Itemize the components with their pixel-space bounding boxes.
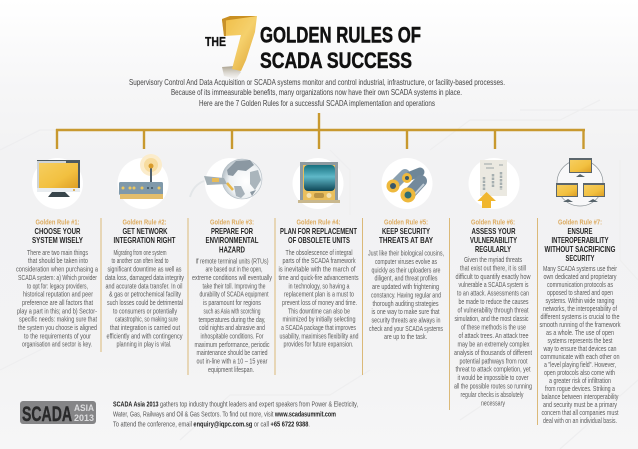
- panel: rule 2: GET NETWORK: [122, 226, 168, 236]
- panel: rule 2: such losses could be detrimental: [107, 298, 183, 307]
- panel: rule 6: difficult to quantify exactly how: [456, 272, 531, 281]
- panel: rule 6: be made to reduce the causes: [458, 297, 529, 306]
- title: [205, 16, 421, 79]
- panel: rule 5: Just like their biological cousins,: [368, 249, 444, 258]
- panel: rule 4: provides for future expansion.: [284, 340, 354, 349]
- panel: rule 5: quickly as their uploaders are: [372, 265, 440, 274]
- panel: rule 3: temperatures during the day,: [198, 315, 266, 324]
- intro text: Supervisory Control And Data Acquisition or SCADA systems monitor and control industrial, infrastructure, or facility-based processes.: [129, 77, 505, 87]
- panel: rule 5: Golden Rule #5:: [384, 220, 428, 226]
- panel: rule 2: planning in play is vital.: [116, 340, 172, 349]
- footer text: To attend the conference, email enquiry@iqpc.com.sg or call +65 6722 9388.: [113, 420, 310, 428]
- panel: rule 6: [454, 220, 533, 408]
- panel: rule 4: This downtime can also be: [288, 306, 350, 315]
- panel: rule 4: parts of the SCADA framework: [282, 256, 356, 265]
- panel: rule 6: VULNERABILITY: [470, 235, 517, 245]
- panel: rule 1: historical reputation and peer: [23, 290, 93, 299]
- panel: rule 1: that should be taken into: [28, 256, 88, 265]
- panel: rule 3: is paramount for regions: [203, 298, 261, 307]
- panel: rule 2: that integration is carried out: [110, 323, 181, 332]
- panel: rule 5: security threats are always in: [372, 316, 440, 324]
- panel: rule 3: HAZARD: [219, 244, 245, 254]
- panel: rule 4: in technology, so having a: [288, 281, 350, 290]
- panel: rule 1: play a part in this; and b) Sector-: [17, 306, 97, 315]
- panel: rule 1: Golden Rule #1:: [36, 220, 80, 226]
- panel: rule 3: [192, 220, 272, 374]
- panel: rule 4: replacement plan is a must to: [284, 290, 354, 299]
- panel: rule 3: extreme conditions will eventually: [192, 273, 272, 282]
- panel: rule 4: prevent loss of money and time.: [282, 298, 357, 307]
- panel: rule 7: as a whole. The use of open: [546, 328, 614, 337]
- panel: rule 6: simulation, and the most classic: [454, 314, 529, 323]
- panel: rule 4: The obsolescence of integral: [286, 248, 353, 257]
- title: SCADA SUCCESS: [260, 48, 412, 73]
- icon: document with arrow: [468, 158, 520, 209]
- title: GOLDEN RULES OF: [260, 22, 421, 47]
- icon: networked monitors: [556, 158, 605, 206]
- panel: rule 2: efficiently and with contingency: [106, 331, 183, 340]
- intro text: [129, 77, 505, 108]
- icon: router: [118, 154, 168, 209]
- panel: rule 5: are up to the task.: [384, 332, 427, 341]
- panel: rule 7: Golden Rule #7:: [558, 220, 602, 226]
- panel: rule 6: may be an extremely complex: [458, 339, 530, 348]
- panel: rule 3: out in-line with a 10 – 15 year: [196, 356, 268, 366]
- panel: rule 1: [16, 220, 99, 349]
- panel: rule 6: necessary: [481, 398, 505, 408]
- panel: rule 6: of attack trees. An attack tree: [458, 331, 528, 340]
- logo: SCADA Asia 2013: ASIA: [74, 403, 94, 413]
- panel: rule 5: constancy. Having regular and: [371, 290, 441, 299]
- panel: rule 2: Migrating from one system: [114, 248, 166, 257]
- panel: rule 2: significant downtime as well as: [108, 265, 182, 274]
- panel: rule 6: to an attack. Assessments can: [457, 289, 529, 298]
- panel: rule 3: cold nights and abrasive and: [199, 323, 265, 332]
- footer text: Water, Gas, Railways and Oil & Gas Sectors. To find out more, visit www.scadasummit.com: [113, 410, 336, 418]
- panel: rule 2: to another can often lead to: [112, 256, 168, 265]
- panel: rule 4: Golden Rule #4:: [296, 220, 340, 226]
- panel: rule 3: durability of SCADA equipment: [200, 290, 269, 299]
- panel: rule 3: inhospitable conditions. For: [200, 332, 264, 340]
- panel: rule 7: SECURITY: [566, 253, 595, 263]
- intro text: Here are the 7 Golden Rules for a successful SCADA implementation and operations: [199, 98, 435, 108]
- panel: rule 6: vulnerable a SCADA system is: [458, 280, 529, 289]
- panel: rule 6: that exist out there, it is still: [460, 263, 526, 272]
- panel: rule 2: data loss, damaged data integrity: [105, 273, 184, 282]
- panel: rule 6: Golden Rule #6:: [471, 220, 515, 226]
- panel: rule 4: minimized by initially selecting: [282, 315, 356, 324]
- panel: rule 6: Given the myriad threats: [464, 255, 522, 264]
- panel: rule 2: [105, 220, 184, 349]
- panel: rule 7: [540, 220, 621, 425]
- panel: rule 1: to opt for: legacy providers,: [27, 281, 88, 290]
- panel: rule 3: PREPARE FOR: [211, 226, 253, 236]
- panel: rule 6: analysis of thousands of different: [454, 348, 533, 357]
- panel: rule 1: SCADA system: a) Which provider: [18, 273, 97, 282]
- panel: rule 5: [368, 220, 444, 341]
- panel: rule 6: potential pathways from root: [460, 356, 528, 365]
- icon: monitor: [32, 158, 83, 209]
- panel: rule 5: is one way to make sure that: [372, 307, 440, 316]
- panel: rule 7: communication protocols as: [547, 280, 613, 289]
- logo: SCADA Asia 2013: SCADA: [22, 403, 72, 426]
- title: THE: [205, 34, 226, 49]
- panel: rule 4: OF OBSOLETE UNITS: [288, 235, 350, 245]
- panel: rule 5: computer viruses evolve as: [375, 257, 437, 266]
- panel: rule 6: of these methods is the use: [461, 322, 526, 332]
- panel: rule 6: REGULARLY: [475, 244, 511, 254]
- panel: rule 2: & gas or petrochemical facility: [109, 290, 181, 299]
- panel: rule 7: ENSURE: [568, 226, 593, 236]
- panel: rule 7: a greater risk of infiltration: [549, 376, 611, 385]
- panel: rule 2: catastrophic, so making sure: [115, 315, 178, 324]
- numeral 7: [222, 16, 257, 79]
- panel: rule 5: KEEP SECURITY: [382, 226, 430, 236]
- footer text: [113, 400, 358, 428]
- connector tree: [56, 113, 585, 149]
- icon: binoculars: [382, 158, 432, 209]
- panel: rule 4: time and quick-fire advancements: [278, 273, 359, 282]
- panel: rule 3: such as Asia with scorching: [204, 306, 260, 315]
- panel: rule 6: ASSESS YOUR: [472, 226, 516, 236]
- panel: rule 5: check and your SCADA systems: [369, 324, 443, 333]
- panel: rule 5: are updated with frightening: [372, 282, 439, 291]
- panel: rule 4: is inevitable with the march of: [278, 265, 356, 274]
- panel: rule 1: There are two main things: [27, 248, 88, 257]
- intro text: Because of its immeasurable benefits, many organizations now have their own SCADA systems in place.: [171, 87, 462, 97]
- panel: rule 6: regular checks is absolutely: [460, 390, 524, 399]
- panel: rule 5: diligent, and threat profiles: [374, 274, 438, 283]
- panel: rule 1: preference are all factors that: [22, 298, 94, 307]
- panel: rule 3: take their toll. Improving the: [202, 281, 266, 290]
- panel: rule 3: maximum performance, periodic: [194, 340, 270, 349]
- panel: rule 1: specific needs: making sure that: [19, 315, 98, 324]
- panel: rule 6: it would be impossible to cover: [458, 373, 529, 382]
- panel: rule 6: all the possible routes so running: [454, 382, 532, 391]
- panel: rule 2: and accurate data transfer. In oil: [106, 281, 183, 290]
- panel: rule 5: thorough auditing strategies: [372, 299, 439, 308]
- panel: rule 3: Golden Rule #3:: [210, 220, 254, 226]
- panel: rule 4: a SCADA package that improves: [281, 323, 356, 332]
- panel: rule 4: usability, maximises flexibility and: [280, 331, 358, 340]
- panel: rule 1: organisation and sector is key.: [22, 340, 92, 349]
- panel: rule 3: maintenance should be carried: [196, 348, 268, 357]
- panel: rule 1: to the requirements of your: [24, 331, 91, 340]
- panel: rule 6: threat to attack completion, yet: [456, 365, 531, 374]
- panel: rule 1: consideration when purchasing a: [16, 265, 99, 274]
- panel: rule 3: are based out in the open,: [206, 265, 262, 274]
- panel: rule 4: PLAN FOR REPLACEMENT: [280, 226, 358, 236]
- panel: rule 7: INTEROPERABILITY: [552, 235, 609, 245]
- panel: rule 4: [278, 220, 359, 349]
- icon: television: [292, 158, 344, 209]
- icon: globe with USB plug: [190, 158, 262, 209]
- panel: rule 1: CHOOSE YOUR: [34, 226, 80, 236]
- logo: SCADA Asia 2013: 2013: [74, 413, 94, 423]
- panel: rule 3: ENVIRONMENTAL: [206, 235, 258, 245]
- panel: rule 6: of vulnerability through threat: [458, 306, 529, 315]
- panel: rule 2: Golden Rule #2:: [122, 220, 166, 226]
- panel: rule 5: THREATS AT BAY: [379, 235, 433, 245]
- panel: rule 3: If remote terminal units (RTUs): [196, 256, 269, 265]
- panel: rule 2: to consumers or potentially: [113, 306, 177, 315]
- panel: rule 2: INTEGRATION RIGHT: [114, 235, 176, 245]
- column dividers: [101, 218, 538, 425]
- panel: rule 1: SYSTEM WISELY: [32, 235, 83, 245]
- panel: rule 3: equipment lifespan.: [208, 365, 254, 374]
- panel: rule 1: the system you choose is aligned: [18, 323, 97, 332]
- footer text: SCADA Asia 2013 gathers top industry thought leaders and expert speakers from Power & Electricity,: [113, 400, 358, 408]
